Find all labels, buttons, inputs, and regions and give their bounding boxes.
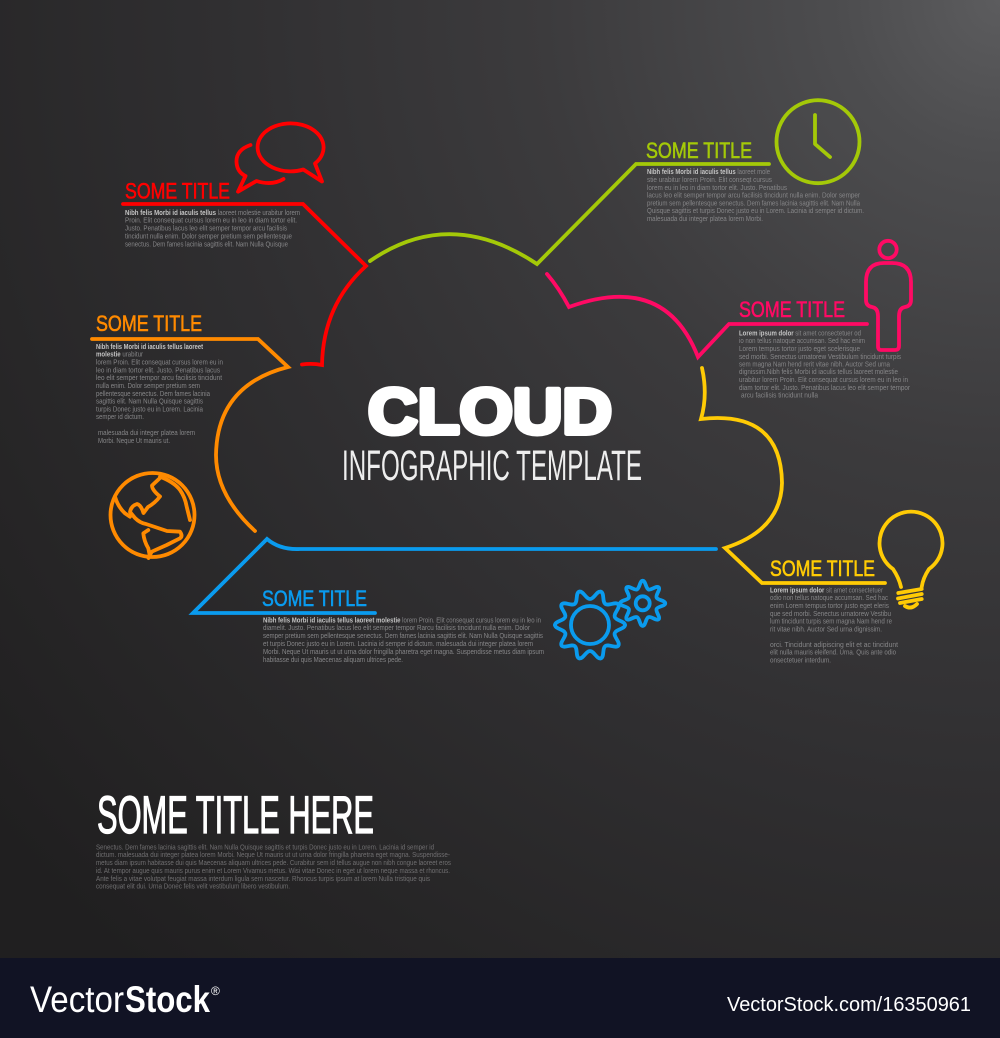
body text: pink: sed morbi. Senectus urnatorew Vestibulum tincidunt turpis bbox=[739, 354, 901, 361]
body text: yellow: Lorem ipsum dolor sit amet consectetuer bbox=[770, 588, 884, 594]
icon: person bbox=[866, 241, 911, 350]
bottom body text bbox=[96, 844, 451, 890]
body text: pink: sem magna Nam hend rerit vitae nibh. Auctor Sed urna bbox=[739, 362, 890, 368]
block: yellow bbox=[770, 556, 898, 664]
body text: yellow: rit vitae nibh. Auctor Sed urna dignissim. bbox=[770, 626, 882, 634]
footer band bbox=[0, 958, 1000, 1038]
body text: pink: Lorem ipsum dolor sit amet consectetuer od bbox=[739, 330, 861, 338]
body text: pink: Lorem tempus tortor justo eget scelerisque bbox=[739, 346, 860, 353]
body text: green bbox=[647, 169, 864, 223]
body text: orange: pellentesque senectus. Dem fames lacinia bbox=[96, 391, 210, 398]
block: green bbox=[646, 138, 864, 223]
heading: blue: SOME TITLE bbox=[262, 586, 367, 611]
bottom body text: dictum. malesuada dui integer platea lorem Morbi. Neque Ut mauris ut ut urna dolor fringilla pharetra eget magna. Suspendisse- bbox=[96, 852, 450, 859]
block: pink bbox=[739, 297, 911, 400]
body text: green: malesuada dui integer platea lorem Morbi. bbox=[647, 216, 763, 223]
body text: yellow: que sed morbi. Senectus urnatorew Vestibu bbox=[770, 611, 891, 618]
heading: yellow: SOME TITLE bbox=[770, 556, 875, 581]
body text: pink bbox=[739, 330, 911, 400]
body text: blue: Morbi. Neque Ut mauris ut ut urna dolor fringilla pharetra eget magna. Suspendisse metus diam ipsum bbox=[263, 649, 544, 656]
bottom body text: consequat elit dui. Urna Donec felis velit vestibulum libero vestibulum. bbox=[96, 884, 290, 890]
bottom heading: SOME TITLE HERE bbox=[97, 786, 374, 845]
body text: green: lacus leo elit semper tempor arcu facilisis tincidunt nulla enim. Dolor semper bbox=[647, 192, 861, 200]
icon: speech bubbles bbox=[236, 123, 324, 192]
block: blue bbox=[262, 586, 544, 664]
main title: CLOUD: CLOUD bbox=[368, 376, 612, 448]
icon: gears bbox=[550, 576, 670, 665]
body text: green: lorem eu in leo in diam tortor elit. Justo. Penatibus bbox=[647, 185, 787, 192]
body text: red: Proin. Elit consequat cursus lorem eu in leo in diam tortor elit. bbox=[125, 218, 297, 225]
heading: green: SOME TITLE bbox=[646, 138, 752, 163]
bottom body text: metus diam ipsum habitasse dui quis Maecenas aliquam ultrices pede. Curabitur sem id tellus augue non nibh congue laoreet eros bbox=[96, 860, 451, 867]
cloud segment: red bbox=[123, 204, 366, 365]
body text: orange: Nibh felis Morbi id iaculis tellus laoreet bbox=[96, 344, 204, 351]
icon: globe bbox=[110, 473, 194, 558]
body text: yellow bbox=[770, 588, 898, 664]
body text: blue: et turpis Donec justo eu in Lorem. Lacinia id semper id dictum. malesuada dui integer platea lorem bbox=[263, 641, 533, 648]
small gear bbox=[616, 576, 670, 630]
heading: orange: SOME TITLE bbox=[96, 311, 202, 336]
block: red bbox=[125, 179, 300, 248]
footer logo: ® bbox=[211, 984, 220, 998]
body text: pink: arcu facilisis tincidunt nulla bbox=[741, 392, 818, 400]
footer logo: Vector bbox=[30, 979, 124, 1020]
body text: orange: leo elit semper tempor arcu facilisis tincidunt bbox=[96, 375, 222, 382]
large gear bbox=[550, 585, 630, 665]
body text: pink: diam tortor elit. Justo. Penatibus lacus leo elit semper tempor bbox=[739, 385, 911, 392]
block: orange bbox=[96, 311, 223, 445]
body text: pink: io non tellus natoque accumsan. Sed hac enim bbox=[739, 338, 865, 345]
cloud segment: blue bbox=[193, 539, 716, 613]
body text: red: tincidunt nulla enim. Dolor semper pretium sem pellentesque bbox=[125, 233, 292, 240]
body text: blue: semper pretium sem pellentesque senectus. Dem fames lacinia sagittis elit. Nam Nulla Quisque sagittis bbox=[263, 633, 543, 640]
body text: orange bbox=[96, 344, 223, 445]
body text: green: pretium sem pellentesque senectus. Dem fames lacinia sagittis elit. Nam Nulla bbox=[647, 200, 860, 208]
bottom body text: Ante felis a vitae volutpat feugiat massa interdum ligula sem nascetur. Rhoncus turpis ipsum at lorem Nulla tristique quis bbox=[96, 876, 430, 883]
cloud segment: yellow bbox=[701, 368, 885, 583]
body text: red: Justo. Penatibus lacus leo elit semper tempor arcu facilisis bbox=[125, 226, 287, 233]
body text: yellow: enim Lorem tempus tortor justo eget eleris bbox=[770, 603, 889, 610]
body text: blue bbox=[263, 618, 544, 664]
bottom body text: id. At tempor augue quis mauris purus enim et Lorem Vivamus metus. Wisi vitae Donec in eget ut lorem neque massa et rhoncus. bbox=[96, 868, 450, 875]
body text: pink: urabitur lorem Proin. Elit consequat cursus lorem eu in leo in bbox=[739, 377, 908, 384]
body text: yellow: lum tincidunt turpis sem magna Nam hend re bbox=[770, 618, 892, 626]
body text: yellow: orci. Tincidunt adipiscing elit et ac tincidunt bbox=[770, 642, 898, 649]
body text: orange: malesuada dui integer platea lorem bbox=[98, 430, 195, 437]
body text: yellow: odio non tellus natoque accumsan. Sed hac bbox=[770, 595, 888, 602]
body text: yellow: elit nulla mauris eleifend. Urna. Quis ante odio bbox=[770, 650, 896, 656]
body text: green: Quisque sagittis et turpis Donec justo eu in Lorem. Lacinia id semper id dictum. bbox=[647, 208, 864, 215]
heading: pink: SOME TITLE bbox=[739, 297, 845, 322]
cloud segment: pink bbox=[547, 274, 867, 357]
body text: blue: Nibh felis Morbi id iaculis tellus laoreet molestie lorem Proin. Elit consequat cursus lorem eu in leo in bbox=[263, 618, 541, 624]
body text: orange: semper id dictum. bbox=[96, 414, 144, 421]
body text: orange: turpis Donec justo eu in Lorem. Lacinia bbox=[96, 406, 203, 414]
body text: green: Nibh felis Morbi id iaculis tellus laoreet mole bbox=[647, 169, 770, 176]
body text: orange: nulla enim. Dolor semper pretium sem bbox=[96, 383, 200, 390]
icon: light bulb bbox=[880, 512, 943, 608]
footer logo: Stock bbox=[125, 979, 210, 1020]
body text: red: Nibh felis Morbi id iaculis tellus laoreet molestie urabitur lorem bbox=[125, 210, 300, 217]
footer image id: VectorStock.com/16350961 bbox=[727, 994, 971, 1016]
bottom body text: Senectus. Dem fames lacinia sagittis elit. Nam Nulla Quisque sagittis et turpis Donec justo eu in Lorem. Lacinia id semper id bbox=[96, 844, 434, 852]
heading: red: SOME TITLE bbox=[125, 179, 230, 204]
body text: orange: sagittis elit. Nam Nulla Quisque sagittis bbox=[96, 398, 203, 406]
body text: pink: dignissim.Nibh felis Morbi id iaculis tellus laoreet molestie bbox=[739, 369, 898, 376]
body text: orange: Morbi. Neque Ut mauris ut. bbox=[98, 438, 170, 445]
body text: orange: leo in diam tortor elit. Justo. Penatibus lacus bbox=[96, 368, 221, 374]
body text: orange: molestie urabitur bbox=[96, 352, 144, 358]
subtitle: INFOGRAPHIC TEMPLATE bbox=[342, 442, 642, 490]
body text: blue: habitasse dui quis Maecenas aliquam ultrices pede. bbox=[263, 657, 403, 664]
body text: red: senectus. Dem fames lacinia sagittis elit. Nam Nulla Quisque bbox=[125, 241, 288, 248]
body text: blue: diamelit. Justo. Penatibus lacus leo elit semper tempor Rarcu facilisis tincidunt nulla enim. Dolor bbox=[263, 625, 531, 632]
body text: red bbox=[125, 210, 300, 248]
body text: orange: lorem Proin. Elit consequat cursus lorem eu in bbox=[96, 360, 223, 366]
footer logo bbox=[30, 979, 220, 1020]
icon: clock bbox=[776, 100, 860, 183]
body text: yellow: onsectetuer interdum. bbox=[770, 658, 831, 664]
cloud segment: green bbox=[370, 164, 769, 264]
body text: green: stie urabitur lorem Proin. Elit conseqt cursus bbox=[647, 177, 773, 184]
cloud segment: orange bbox=[92, 339, 288, 531]
